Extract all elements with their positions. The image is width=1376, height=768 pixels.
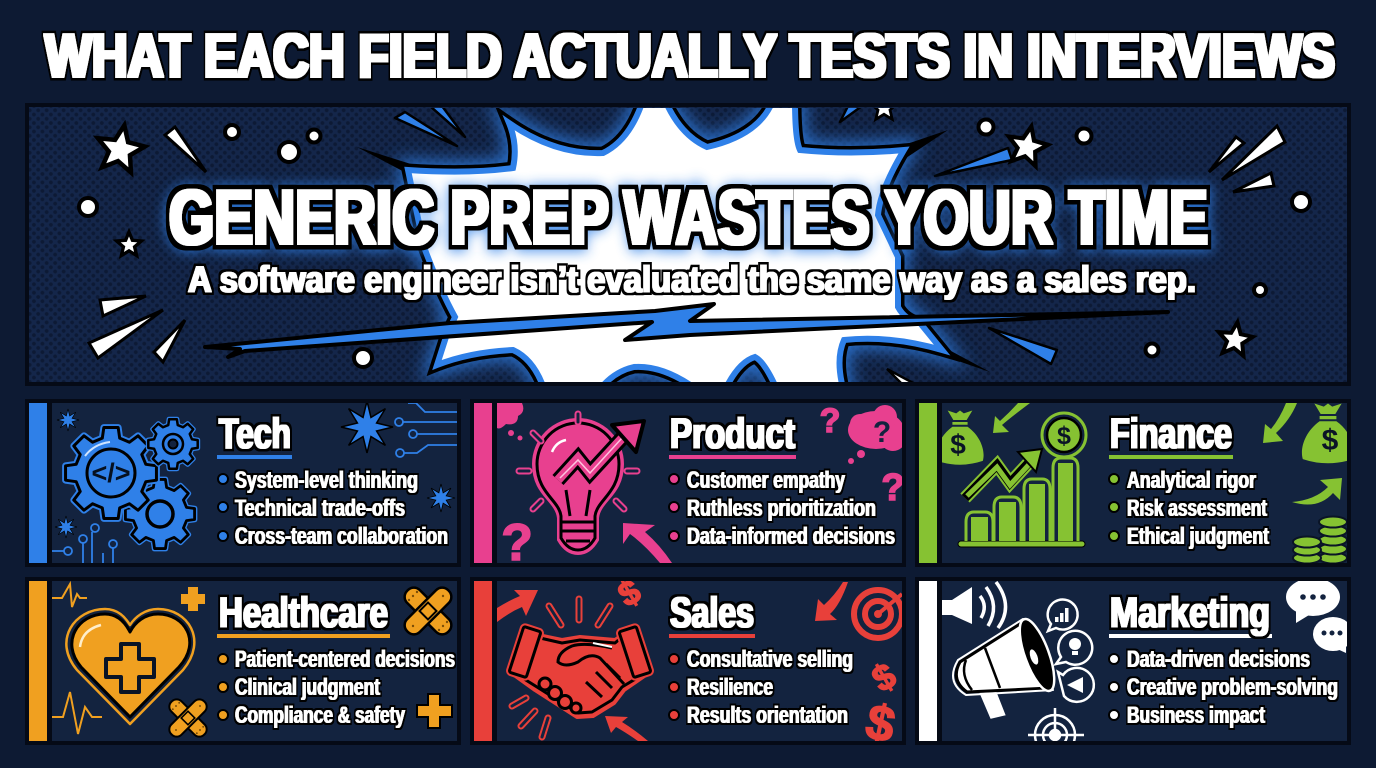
hero subtitle: A software engineer isn’t evaluated the same way as a sales rep. [188, 259, 1196, 300]
heading: Finance: Finance [1110, 410, 1232, 458]
star accents [55, 401, 455, 538]
money bags [942, 410, 984, 465]
coin stacks [1293, 516, 1347, 564]
top star [874, 108, 894, 122]
bullet list: Sales: Results orientation [687, 702, 848, 729]
icon: gears [52, 401, 457, 563]
question marks and thought clouds: ? [820, 402, 840, 440]
dollar signs [618, 581, 896, 741]
white spike [887, 369, 915, 384]
panel: Tech [27, 401, 459, 565]
lightning bolt [205, 304, 1168, 357]
circuit lines [52, 403, 457, 563]
panel: hero banner [27, 94, 1349, 392]
bullet list: Healthcare: Compliance & safety [235, 702, 405, 729]
target reticle [1028, 708, 1084, 741]
bullet list: Sales: Consultative selling [687, 646, 853, 673]
dollar signs: $ [612, 572, 647, 615]
bullet list: Healthcare: Clinical judgment [235, 674, 380, 701]
dollar signs: $ [861, 693, 900, 754]
icon: heart with cross [52, 584, 455, 739]
heading: Healthcare: Healthcare [219, 589, 388, 637]
bullet list: Product: Data-informed decisions [687, 523, 895, 550]
icon: growth chart and coin: $ [950, 429, 966, 460]
bullet list: Sales [669, 646, 853, 729]
icon: handshake [497, 581, 902, 741]
bullet list: Tech: Cross-team collaboration [235, 523, 448, 550]
speaker [942, 587, 972, 624]
icon: light bulb with arrow: ? [873, 416, 891, 449]
icon: growth chart and coin: $ [1322, 424, 1339, 457]
bullet list: Healthcare [218, 646, 455, 729]
heading: Product: Product [670, 410, 795, 458]
target [854, 590, 902, 638]
icon: growth chart and coin [936, 403, 1354, 564]
bullet list: Tech: Technical trade-offs [235, 495, 405, 522]
bullet list: Healthcare: Patient-centered decisions [235, 646, 455, 673]
question marks and thought clouds: ? [501, 514, 533, 572]
icon bubbles [1048, 600, 1094, 702]
speech bubbles [1286, 581, 1347, 653]
bullet list: Product [669, 467, 895, 550]
bullet list: Finance: Analytical rigor [1127, 467, 1256, 494]
bullet list: Tech: System-level thinking [235, 467, 418, 494]
bullet list: Finance: Ethical judgment [1127, 523, 1269, 550]
panel: Healthcare [27, 579, 459, 743]
bullet list: Product: Customer empathy [687, 467, 845, 494]
heading: Sales: Sales [670, 589, 754, 637]
bullet list: Sales: Resilience [687, 674, 773, 701]
plus signs [181, 587, 205, 611]
arrows [497, 582, 848, 741]
panel: Product [472, 401, 906, 572]
question marks and thought clouds: ? [881, 467, 905, 509]
panel: Finance [917, 401, 1354, 565]
arrows [993, 403, 1342, 505]
heading: Marketing: Marketing [1110, 589, 1270, 637]
icon: megaphone [942, 581, 1347, 741]
panel: Sales [472, 572, 904, 754]
decorative stars and dots [79, 120, 1310, 367]
comic starburst [357, 94, 1057, 392]
underline: Marketing [1109, 634, 1272, 638]
bullet list: Marketing: Data-driven decisions [1127, 646, 1310, 673]
panel: Marketing [917, 578, 1353, 755]
bullet list: Finance: Risk assessment [1127, 495, 1267, 522]
bullet list: Marketing: Business impact [1127, 702, 1265, 729]
bullet list: Product: Ruthless prioritization [687, 495, 876, 522]
question marks and thought clouds [497, 402, 906, 572]
bullet list: Marketing [1109, 646, 1338, 729]
bandages [403, 586, 453, 636]
pulse lines [52, 584, 87, 607]
heading: Tech: Tech [219, 410, 291, 458]
bullet list: Finance [1109, 467, 1269, 550]
icon: gears: </> [91, 458, 131, 488]
burst rays [512, 599, 610, 737]
icon: growth chart and coin: $ [1057, 422, 1071, 450]
blue shards [395, 106, 1057, 364]
bullet list: Tech [218, 467, 448, 550]
dollar signs: $ [865, 654, 903, 700]
icon: light bulb with arrow [497, 402, 906, 572]
